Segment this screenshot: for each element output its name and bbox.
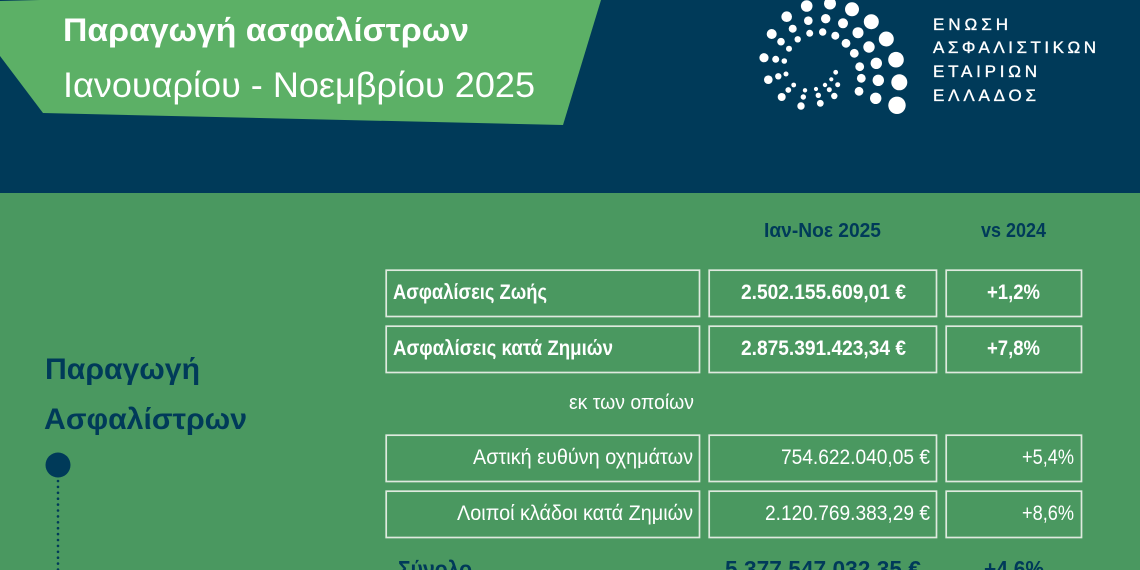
row: non-life insurance <box>386 326 1082 372</box>
column headers <box>764 219 1047 242</box>
section heading: Ασφαλίστρων <box>44 403 247 436</box>
row: other non-life branches <box>386 491 1082 538</box>
row: total <box>398 556 1044 570</box>
icon: association logo dots <box>759 0 907 114</box>
row: other non-life branches: 2.120.769.383,29 € <box>765 502 930 525</box>
title banner <box>0 0 601 125</box>
row: motor liability: +5,4% <box>1022 446 1074 469</box>
header band <box>0 0 1140 193</box>
logo wordmark: ΕΛΛΑΔΟΣ <box>933 86 1036 105</box>
section heading <box>44 353 247 436</box>
logo wordmark: ΕΝΩΣΗ <box>933 15 1008 34</box>
title banner: Ιανουαρίου - Νοεμβρίου 2025 <box>63 66 535 105</box>
column headers: vs 2024 <box>981 219 1047 242</box>
title banner: Παραγωγή ασφαλίστρων <box>63 12 469 48</box>
column headers: Ιαν-Νοε 2025 <box>764 219 881 242</box>
content background <box>0 193 1140 570</box>
row: life insurance <box>386 270 1082 316</box>
section heading: Παραγωγή <box>45 353 200 386</box>
row: life insurance: Ασφαλίσεις Ζωής <box>393 281 547 304</box>
logo wordmark: ΕΤΑΙΡΙΩΝ <box>933 62 1037 81</box>
row: life insurance: 2.502.155.609,01 € <box>741 281 906 304</box>
row: motor liability: Αστική ευθύνη οχημάτων <box>473 446 693 469</box>
row: motor liability <box>386 435 1082 482</box>
sub-heading: of which: εκ των οποίων <box>569 392 694 414</box>
row: other non-life branches: +8,6% <box>1022 502 1074 525</box>
row: life insurance: +1,2% <box>987 281 1040 304</box>
row: non-life insurance: +7,8% <box>987 337 1040 360</box>
row: motor liability: 754.622.040,05 € <box>781 446 930 469</box>
row: non-life insurance: Ασφαλίσεις κατά Ζημιών <box>393 337 613 360</box>
row: non-life insurance: 2.875.391.423,34 € <box>741 337 906 360</box>
row: other non-life branches: Λοιποί κλάδοι κατά Ζημιών <box>457 502 693 525</box>
logo wordmark: ΑΣΦΑΛΙΣΤΙΚΩΝ <box>933 38 1096 57</box>
logo wordmark <box>933 15 1096 105</box>
timeline marker with dotted line <box>46 452 70 570</box>
